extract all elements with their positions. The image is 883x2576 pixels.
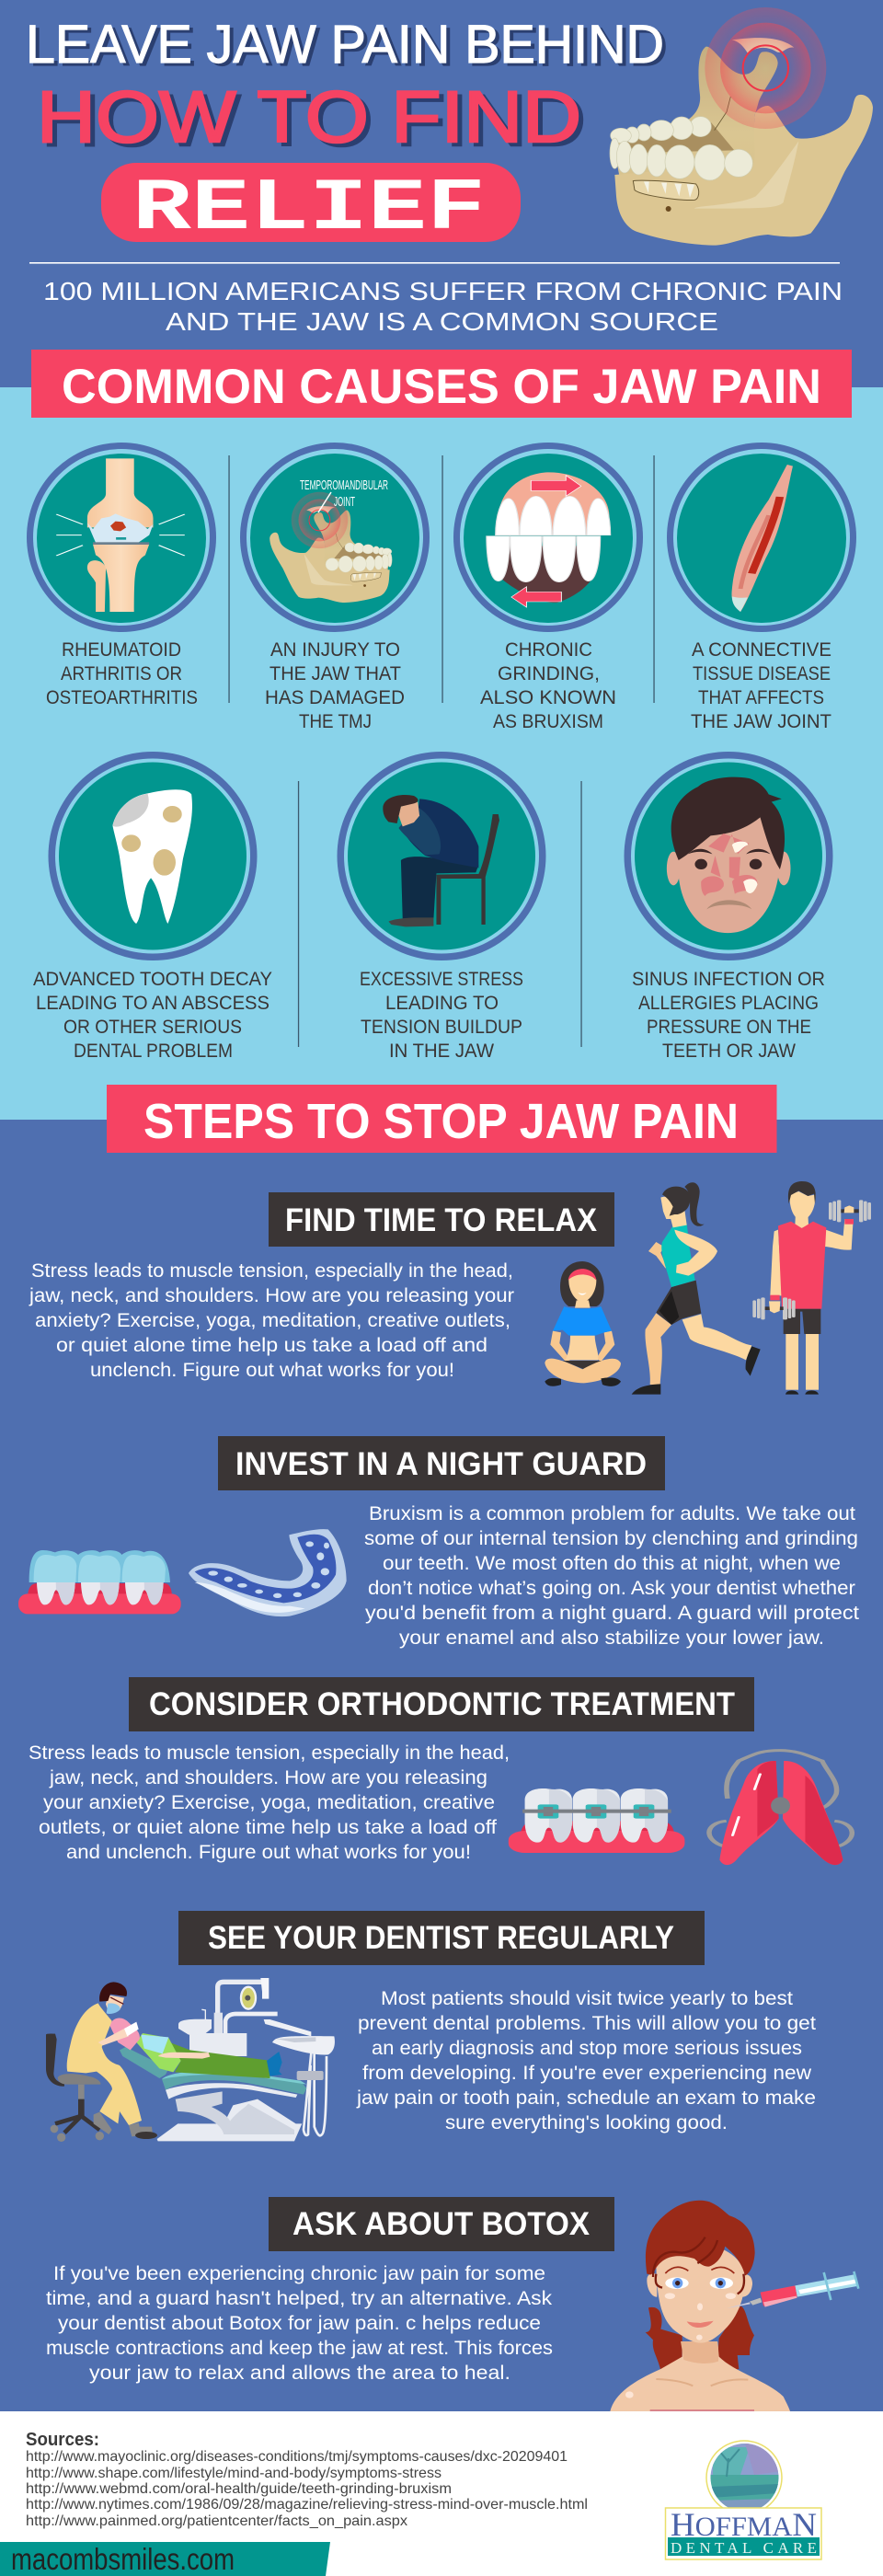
- illustration: dentist and patient in chair: [46, 1978, 335, 2142]
- heading banner: common causes of jaw pain: COMMON CAUSES OF JAW PAIN: [62, 360, 821, 414]
- logo: Hoffman Dental Care: HOFFMAN: [671, 2506, 817, 2543]
- body text: don’t notice what’s going on. Ask your dentist whether: [368, 1578, 855, 1599]
- source links: http://www.nytimes.com/1986/09/28/magazine/relieving-stress-mind-over-muscle.html: [26, 2497, 588, 2513]
- body text: sure everything's looking good.: [445, 2112, 728, 2133]
- heading: ASK ABOUT BOTOX: [292, 2206, 591, 2242]
- subtitle statistic: [43, 277, 843, 336]
- illustration: woman receiving injection: [610, 2201, 858, 2411]
- white footer background: [0, 2411, 883, 2576]
- caption: [480, 639, 616, 732]
- panel: causes row one: [27, 443, 856, 732]
- illustration: man lifting dumbbells: [752, 1181, 871, 1395]
- icon: temporomandibular joint jaw: TEMPOROMANDIBULAR: [300, 477, 388, 493]
- cause: excessive stress: [337, 752, 546, 1062]
- body text: [364, 1503, 859, 1649]
- caption: HAS DAMAGED: [265, 687, 405, 708]
- title pill: relief: [101, 163, 521, 251]
- icon: stressed man on chair: [337, 752, 546, 960]
- body text: jaw, neck, and shoulders. How are you releasing your: [29, 1285, 514, 1306]
- heading banner: steps to stop jaw pain: STEPS TO STOP JAW PAIN: [143, 1094, 739, 1149]
- caption: DENTAL PROBLEM: [74, 1041, 233, 1062]
- heading: INVEST IN A NIGHT GUARD: [235, 1446, 647, 1482]
- caption: A CONNECTIVE: [692, 639, 831, 661]
- body text: your anxiety? Exercise, yoga, meditation, creative: [43, 1792, 495, 1813]
- caption: [360, 969, 523, 1062]
- caption: GRINDING,: [498, 663, 600, 684]
- caption: [691, 639, 831, 732]
- body text: unclench. Figure out what works for you!: [90, 1360, 454, 1381]
- icon: temporomandibular joint jaw: JOINT: [334, 494, 355, 510]
- caption: THE TMJ: [299, 711, 372, 732]
- caption: THE JAW THAT: [269, 663, 401, 684]
- subtitle statistic: AND THE JAW IS A COMMON SOURCE: [166, 307, 718, 336]
- caption: SINUS INFECTION OR: [632, 969, 825, 990]
- title pill: relief: RELIEF: [132, 167, 486, 251]
- caption: [265, 639, 405, 732]
- body text: from developing. If you're ever experiencing new: [362, 2063, 812, 2084]
- title: how to find: HOW TO FIND: [37, 75, 581, 157]
- heading: [178, 1911, 705, 1965]
- icon: clear night guard: [189, 1529, 347, 1616]
- body text: [29, 1742, 510, 1863]
- body text: muscle contractions and keep the jaw at rest. This forces: [46, 2338, 553, 2359]
- title: leave jaw pain behind: LEAVE JAW PAIN BEHIND: [29, 17, 668, 77]
- panel: consider orthodontic treatment: [29, 1677, 852, 1865]
- source links: [26, 2449, 588, 2529]
- logo: Hoffman Dental Care: [666, 2441, 821, 2559]
- caption: EXCESSIVE STRESS: [360, 969, 523, 990]
- heading: [129, 1677, 754, 1731]
- illustration: yoga woman: [545, 1261, 621, 1386]
- icon: muscle: [667, 443, 856, 632]
- source links: http://www.webmd.com/oral-health/guide/teeth-grinding-bruxism: [26, 2481, 452, 2497]
- caption: TISSUE DISEASE: [693, 663, 831, 684]
- body text: you'd benefit from a night guard. A guard will protect: [365, 1603, 859, 1624]
- caption: IN THE JAW: [389, 1041, 494, 1062]
- body text: our teeth. We most often do this at night, when we: [383, 1553, 841, 1574]
- source links: http://www.painmed.org/patientcenter/facts_on_pain.aspx: [26, 2513, 407, 2529]
- website tab: macombsmiles.com: [11, 2542, 235, 2576]
- caption: [33, 969, 272, 1062]
- caption: ALSO KNOWN: [480, 687, 616, 708]
- body text: jaw, neck, and shoulders. How are you releasing: [49, 1767, 487, 1788]
- body text: Stress leads to muscle tension, especially in the head,: [29, 1742, 510, 1764]
- caption: PRESSURE ON THE: [647, 1017, 811, 1038]
- cause: tooth decay: [33, 752, 272, 1062]
- body text: Bruxism is a common problem for adults. We take out: [369, 1503, 855, 1524]
- heading: SEE YOUR DENTIST REGULARLY: [208, 1920, 674, 1956]
- heading: CONSIDER ORTHODONTIC TREATMENT: [149, 1686, 735, 1722]
- icon: teeth with braces: [509, 1788, 684, 1853]
- body text: prevent dental problems. This will allow you to get: [358, 2013, 816, 2034]
- caption: [632, 969, 825, 1062]
- body text: and unclench. Figure out what works for you!: [66, 1842, 471, 1863]
- caption: ADVANCED TOOTH DECAY: [33, 969, 272, 990]
- title: how to find: HOW TO FIND: [41, 79, 586, 161]
- body text: your dentist about Botox for jaw pain. c helps reduce: [58, 2313, 541, 2334]
- body text: [356, 1988, 816, 2133]
- caption: [46, 639, 198, 708]
- icon: damaged knee joint: [27, 443, 216, 632]
- caption: ALLERGIES PLACING: [638, 993, 819, 1014]
- cause: sinus infection: [624, 752, 833, 1062]
- icon: teeth with guard: [18, 1550, 181, 1614]
- caption: CHRONIC: [505, 639, 592, 661]
- caption: RHEUMATOID: [62, 639, 181, 661]
- icon: grinding teeth with arrows: [453, 443, 643, 632]
- icon: retainer: [709, 1751, 852, 1865]
- caption: OR OTHER SERIOUS: [63, 1017, 242, 1038]
- body text: your jaw to relax and allows the area to heal.: [89, 2363, 510, 2384]
- source links: http://www.shape.com/lifestyle/mind-and-body/symptoms-stress: [26, 2466, 442, 2481]
- panel: causes row two: [33, 752, 833, 1062]
- panel: see your dentist regularly: [46, 1911, 816, 2142]
- body text: Stress leads to muscle tension, especially in the head,: [31, 1260, 513, 1282]
- cause: chronic grinding: [453, 443, 643, 732]
- caption: AS BRUXISM: [493, 711, 603, 732]
- divider line: [29, 262, 840, 264]
- panel: find time to relax: [29, 1181, 871, 1395]
- caption: TEETH OR JAW: [662, 1041, 796, 1062]
- icon: decayed tooth: [48, 752, 258, 960]
- sources heading: Sources:: [26, 2430, 99, 2450]
- body text: your enamel and also stabilize your lower jaw.: [399, 1627, 824, 1649]
- light blue causes section background: [0, 387, 883, 1120]
- logo: Hoffman Dental Care: DENTAL CARE: [671, 2539, 817, 2557]
- caption: THAT AFFECTS: [698, 687, 824, 708]
- caption: LEADING TO AN ABSCESS: [36, 993, 269, 1014]
- cause: injury to the jaw: [240, 443, 430, 732]
- cause: connective tissue disease: [667, 443, 856, 732]
- caption: OSTEOARTHRITIS: [46, 687, 198, 708]
- caption: TENSION BUILDUP: [361, 1017, 522, 1038]
- panel: invest in a night guard: [18, 1436, 859, 1649]
- panel: ask about botox: [46, 2197, 858, 2411]
- icon: temporomandibular joint jaw: [240, 443, 430, 632]
- illustration: runner: [632, 1182, 761, 1395]
- caption: THE JAW JOINT: [691, 711, 831, 732]
- body text: If you've been experiencing chronic jaw pain for some: [53, 2263, 545, 2284]
- body text: Most patients should visit twice yearly to best: [381, 1988, 793, 2009]
- body text: [29, 1260, 514, 1381]
- body text: jaw pain or tooth pain, schedule an exam to make: [356, 2087, 816, 2109]
- heading: FIND TIME TO RELAX: [285, 1202, 598, 1238]
- illustration: jawbone with pain rings: [610, 7, 873, 246]
- body text: anxiety? Exercise, yoga, meditation, creative outlets,: [35, 1310, 510, 1331]
- body text: outlets, or quiet alone time help us take a load off: [39, 1817, 497, 1838]
- heading: [269, 2197, 614, 2251]
- source links: http://www.mayoclinic.org/diseases-conditions/tmj/symptoms-causes/dxc-20209401: [26, 2449, 568, 2465]
- body text: an early diagnosis and stop more serious issues: [372, 2038, 802, 2059]
- cause: rheumatoid arthritis: [27, 443, 216, 708]
- title: leave jaw pain behind: LEAVE JAW PAIN BEHIND: [26, 15, 664, 75]
- body text: or quiet alone time help us take a load off and: [56, 1335, 487, 1356]
- body text: [46, 2263, 553, 2384]
- heading: [218, 1436, 665, 1490]
- caption: ARTHRITIS OR: [61, 663, 182, 684]
- panel: sources: [26, 2430, 588, 2529]
- caption: LEADING TO: [385, 993, 499, 1014]
- body text: some of our internal tension by clenching and grinding: [364, 1528, 858, 1549]
- caption: AN INJURY TO: [270, 639, 400, 661]
- heading: [269, 1192, 614, 1247]
- subtitle statistic: 100 MILLION AMERICANS SUFFER FROM CHRONIC PAIN: [43, 277, 843, 305]
- body text: time, and a guard hasn't helped, try an alternative. Ask: [46, 2288, 553, 2309]
- panel: header: [26, 7, 873, 336]
- icon: face with inflamed sinuses: [624, 752, 833, 960]
